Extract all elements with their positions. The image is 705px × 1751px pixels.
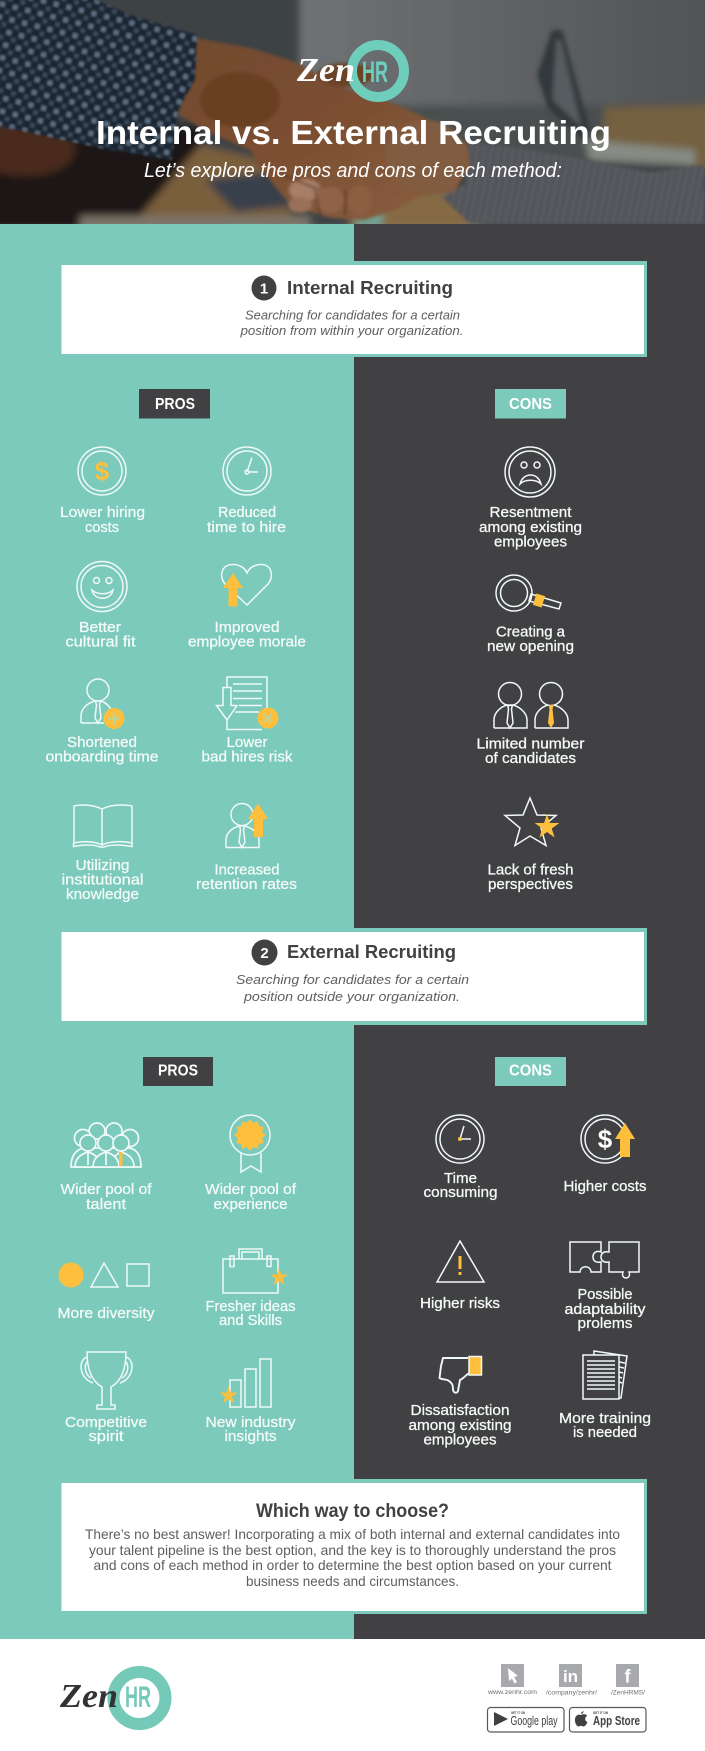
item: utilizing institutional knowledge xyxy=(62,805,144,903)
item: resentment xyxy=(479,447,582,550)
item: utilizing institutional knowledge: institutional xyxy=(62,872,144,888)
item: increased retention rates xyxy=(196,804,297,893)
item: new industry insights: New industry xyxy=(206,1415,296,1431)
description: position outside your organization. xyxy=(243,989,460,1004)
number badge 1 xyxy=(252,276,276,300)
number badge 2: 2 xyxy=(260,945,269,962)
item: more diversity: More diversity xyxy=(58,1306,155,1322)
badge: cons: CONS xyxy=(509,396,552,413)
item: higher costs: Higher costs xyxy=(564,1179,646,1195)
item: new industry insights: insights xyxy=(224,1429,276,1445)
panel: external pros xyxy=(58,1057,297,1445)
description: Searching for candidates for a certain xyxy=(236,972,469,987)
item: new industry insights xyxy=(206,1359,296,1445)
item: lower bad hires risk: bad hires risk xyxy=(202,750,293,766)
item: creating a new opening: Creating a xyxy=(496,624,565,640)
badge: cons xyxy=(495,1057,566,1086)
item: shortened onboarding time: onboarding time xyxy=(46,750,158,766)
logo: ZenHR footer xyxy=(59,1672,166,1724)
item: lower hiring costs: costs xyxy=(85,520,119,536)
item: lack of fresh perspectives: Lack of fresh xyxy=(488,862,574,878)
item: more training is needed: is needed xyxy=(573,1425,637,1441)
item: higher costs: $ xyxy=(598,1124,613,1154)
logo: ZenHR footer: Zen xyxy=(59,1678,118,1715)
item: dissatisfaction among existing employees: Dissatisfaction xyxy=(410,1403,510,1419)
item: possible adaptability problems: Possible xyxy=(578,1287,632,1303)
conclusion text xyxy=(85,1527,620,1589)
item: utilizing institutional knowledge: knowledge xyxy=(66,887,139,903)
button: google play: Google play xyxy=(510,1714,558,1728)
website link: www.zenhr.com xyxy=(487,1689,538,1696)
conclusion text: business needs and circumstances. xyxy=(246,1574,459,1589)
item: higher risks: Higher risks xyxy=(420,1296,500,1312)
button: google play: GET IT ON xyxy=(511,1711,525,1715)
number badge 1: 1 xyxy=(260,280,268,298)
panel: which way to choose xyxy=(61,1479,647,1614)
description: Searching for candidates for a certain xyxy=(245,308,460,322)
conclusion text: There’s no best answer! Incorporating a mix of both internal and external candidates into xyxy=(85,1527,620,1542)
item: resentment: employees xyxy=(494,534,567,550)
item: dissatisfaction among existing employees xyxy=(408,1356,512,1448)
badge: pros xyxy=(139,389,210,418)
item: lack of fresh perspectives xyxy=(488,798,574,893)
item: lower hiring costs: Lower hiring xyxy=(60,505,145,521)
facebook link xyxy=(611,1664,645,1696)
item: fresher ideas and skills: Fresher ideas xyxy=(206,1299,296,1315)
item: limited number of candidates: of candidates xyxy=(485,751,576,767)
badge: pros xyxy=(143,1057,213,1086)
item: competitive spirit: spirit xyxy=(88,1429,124,1445)
item: wider pool of talent: Wider pool of xyxy=(60,1182,153,1198)
panel: internal pros xyxy=(46,389,306,903)
description xyxy=(239,308,464,338)
item: improved employee morale: employee morale xyxy=(188,634,306,650)
item: fresher ideas and skills xyxy=(206,1249,296,1329)
header photo: handshake xyxy=(0,0,705,230)
item: competitive spirit: Competitive xyxy=(65,1415,147,1431)
item: dissatisfaction among existing employees: among existing xyxy=(408,1418,512,1434)
item: limited number of candidates: Limited number xyxy=(476,736,585,752)
item: limited number of candidates xyxy=(476,682,585,767)
description xyxy=(236,972,469,1004)
logo: ZenHR footer: HR xyxy=(125,1681,151,1714)
item: resentment: Resentment xyxy=(490,505,572,521)
button: app store: GET IT ON xyxy=(593,1711,608,1715)
logo: ZenHR header xyxy=(296,45,404,97)
panel: external cons xyxy=(408,1057,651,1448)
panel: external recruiting heading xyxy=(61,928,647,1025)
footer xyxy=(0,1639,705,1751)
linkedin link: /company/zenhr/ xyxy=(546,1690,597,1696)
conclusion text: your talent pipeline is the best option, and the key is to thoroughly understand the pros xyxy=(89,1543,616,1558)
description: position from within your organization. xyxy=(239,323,464,338)
button: app store: App Store xyxy=(593,1714,640,1728)
item: lower hiring costs: $ xyxy=(95,456,110,486)
heading: internal recruiting: Internal Recruiting xyxy=(287,278,453,298)
item: wider pool of experience: Wider pool of xyxy=(205,1182,297,1198)
button: app store xyxy=(570,1708,646,1732)
panel: internal recruiting heading xyxy=(61,261,647,357)
badge: pros: PROS xyxy=(158,1062,198,1080)
item: improved employee morale xyxy=(188,564,306,650)
item: better cultural fit: Better xyxy=(79,620,121,636)
item: utilizing institutional knowledge: Utilizing xyxy=(76,858,130,874)
facebook link: /ZenHRMS/ xyxy=(611,1690,645,1696)
item: improved employee morale: Improved xyxy=(214,620,280,636)
website link xyxy=(487,1664,538,1696)
subtitle: Let’s explore the pros and cons of each method: xyxy=(144,160,562,182)
item: dissatisfaction among existing employees: employees xyxy=(424,1432,496,1448)
item: lower bad hires risk: Lower xyxy=(226,735,268,751)
linkedin link: in xyxy=(563,1667,578,1686)
item: more training is needed: More training xyxy=(559,1411,651,1427)
item: more training is needed xyxy=(559,1351,651,1441)
item: lower bad hires risk xyxy=(202,677,293,766)
item: better cultural fit xyxy=(66,562,136,650)
title: Internal vs. External Recruiting xyxy=(96,114,611,151)
item: higher costs xyxy=(564,1115,646,1195)
item: time consuming xyxy=(424,1115,498,1201)
heading: Which way to choose? xyxy=(256,1501,449,1522)
item: shortened onboarding time xyxy=(46,679,158,766)
item: possible adaptability problems: adaptability xyxy=(564,1302,646,1318)
item: lack of fresh perspectives: perspectives xyxy=(488,877,573,893)
panel: internal cons xyxy=(476,389,585,893)
item: creating a new opening: new opening xyxy=(487,639,574,655)
item: resentment: among existing xyxy=(479,520,582,536)
item: fresher ideas and skills: and Skills xyxy=(219,1313,282,1329)
heading: external recruiting: External Recruiting xyxy=(287,942,456,962)
item: competitive spirit xyxy=(65,1352,147,1445)
item: time consuming: Time xyxy=(444,1171,477,1187)
facebook link: f xyxy=(624,1666,632,1686)
button: google play xyxy=(488,1708,564,1732)
number badge 2 xyxy=(252,940,278,966)
item: reduced time to hire: time to hire xyxy=(207,520,286,536)
item: more diversity xyxy=(58,1262,155,1322)
item: increased retention rates: retention rates xyxy=(196,877,297,893)
conclusion text: and cons of each method in order to determine the best option based on your current xyxy=(94,1558,612,1573)
item: possible adaptability problems: prolems xyxy=(578,1316,632,1332)
linkedin link xyxy=(546,1664,597,1696)
item: reduced time to hire: Reduced xyxy=(218,505,276,521)
logo: ZenHR header: Zen xyxy=(296,52,355,89)
item: better cultural fit: cultural fit xyxy=(66,634,136,650)
item: wider pool of talent: talent xyxy=(86,1197,126,1213)
logo: ZenHR header: HR xyxy=(362,56,388,89)
badge: pros: PROS xyxy=(155,396,195,413)
item: reduced time to hire xyxy=(207,447,286,536)
badge: cons xyxy=(495,389,566,418)
item: lower hiring costs xyxy=(60,447,145,536)
item: possible adaptability problems xyxy=(564,1242,646,1332)
item: increased retention rates: Increased xyxy=(214,862,280,878)
item: wider pool of experience: experience xyxy=(214,1197,288,1213)
item: creating a new opening xyxy=(487,575,574,655)
badge: cons: CONS xyxy=(509,1062,552,1080)
item: higher risks xyxy=(420,1241,500,1312)
item: wider pool of experience xyxy=(205,1115,297,1213)
item: time consuming: consuming xyxy=(424,1185,498,1201)
item: wider pool of talent xyxy=(60,1123,153,1213)
item: shortened onboarding time: Shortened xyxy=(67,735,137,751)
